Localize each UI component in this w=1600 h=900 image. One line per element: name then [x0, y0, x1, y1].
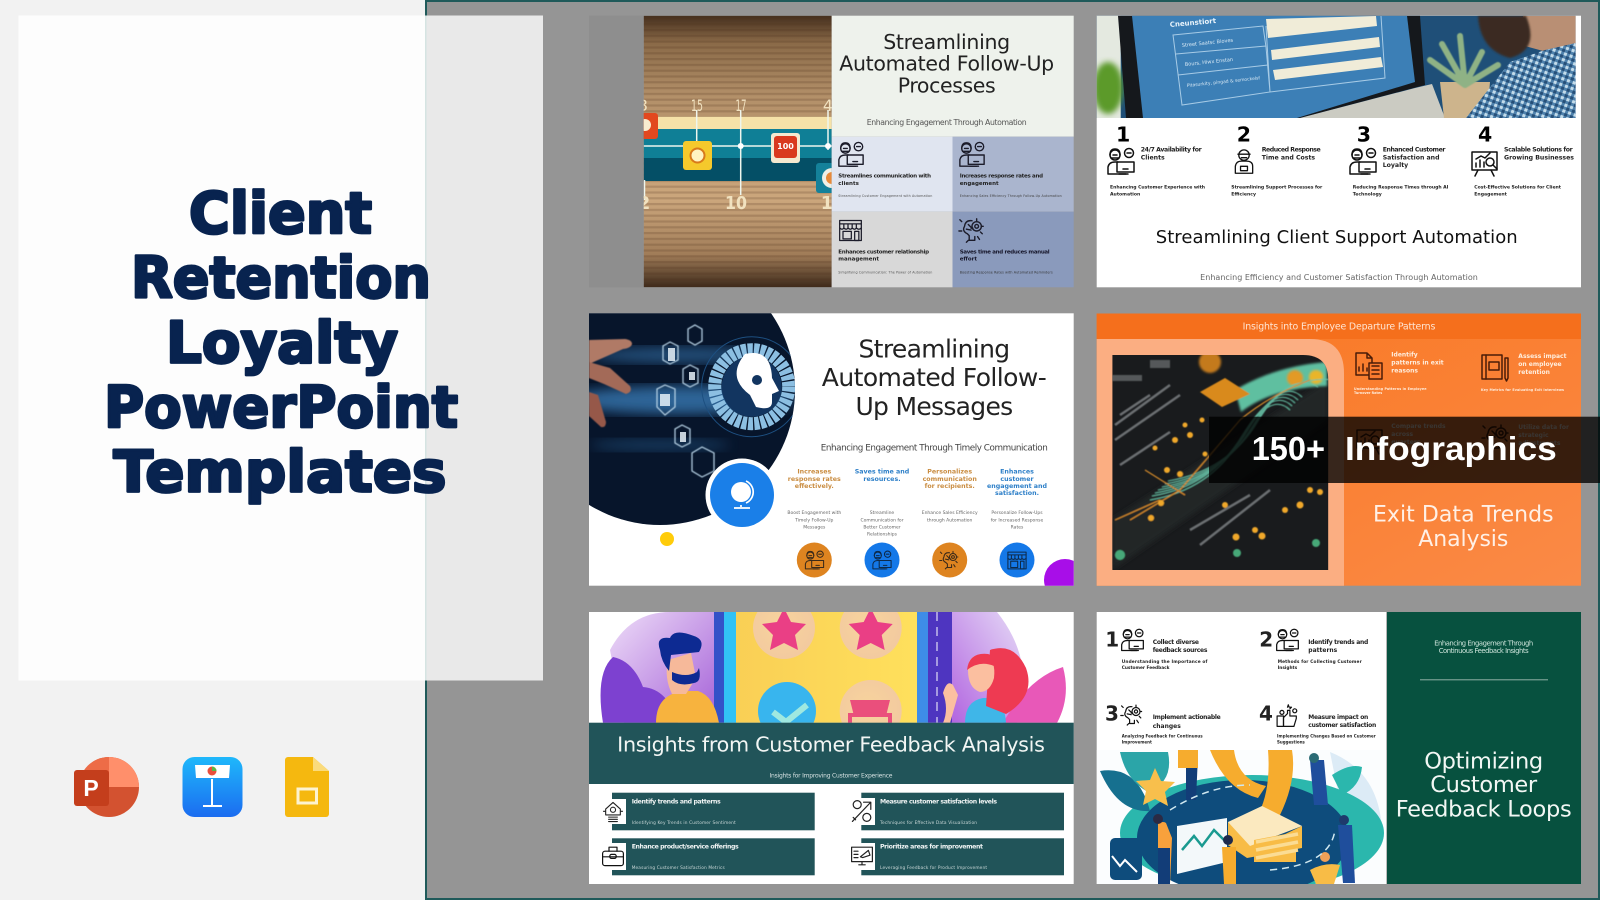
step 2: [1231, 123, 1323, 197]
step 2: Reduced Response: [1262, 146, 1321, 153]
item: utilize data: Utilize data for: [1518, 424, 1569, 431]
image: feedback illustration: [600, 612, 1066, 723]
column 1: effectively.: [795, 483, 834, 490]
card: saves time: [952, 212, 1074, 287]
card: enhances customer relationship: Simplifying Communication: The Power of Automation: [838, 270, 932, 274]
step 4: Scalable Solutions for: [1504, 146, 1574, 153]
step 2: Efficiency: [1231, 191, 1256, 197]
heading: slide 3 title: Automated Follow-: [822, 363, 1047, 392]
block: green title panel: Optimizing: [1424, 748, 1543, 774]
image: timeline on wood: 17: [736, 96, 746, 115]
icon: globe badge: [706, 458, 778, 532]
icon: PowerPoint: P: [83, 775, 99, 801]
step 1: Clients: [1141, 154, 1165, 161]
step 2: Insights: [1278, 665, 1298, 671]
column 4: Enhances: [1000, 469, 1034, 476]
icon: PowerPoint: [74, 757, 139, 817]
card: saves time: Saves time and reduces manual: [960, 249, 1050, 255]
step 2: [1259, 628, 1368, 671]
card: increases response rates: [952, 137, 1074, 212]
block: title area: Streamlining: [883, 30, 1010, 54]
step 3: [1350, 123, 1449, 197]
image: monitor and plant photo: Pitasurkity, pingad & semockelsf: [1187, 75, 1261, 89]
column 2: Saves time and: [855, 469, 909, 476]
column 2: [855, 469, 909, 578]
image: monitor and plant photo: Bours, Hiwx Enstan: [1185, 57, 1233, 68]
item: identify patterns: Turnover Rates: [1354, 391, 1382, 395]
item: assess impact: Assess impact: [1518, 353, 1567, 360]
card: enhance offerings: Enhance product/service offerings: [632, 844, 739, 851]
step 3: Analyzing Feedback for Continuous: [1122, 734, 1203, 739]
step 2: patterns: [1308, 647, 1338, 654]
step 4: Measure impact on: [1308, 714, 1368, 721]
card: measure satisfaction: Techniques for Effective Data Visualization: [879, 820, 977, 826]
column 3: communication: [923, 476, 977, 483]
image: data dashboard: [1112, 351, 1335, 570]
card: saves time: effort: [960, 257, 977, 263]
step 2: Methods for Collecting Customer: [1278, 659, 1363, 665]
block: title area: [832, 16, 1074, 137]
step 4: Suggestions: [1277, 740, 1305, 744]
step 3: 3: [1105, 702, 1119, 726]
step 1: Enhancing Customer Experience with: [1110, 185, 1205, 191]
panel: slide 5 customer feedback analysis: [589, 597, 1074, 884]
panel: title card: [18, 16, 543, 680]
image: monitor and plant photo: Cneunstiort: [1169, 17, 1217, 29]
item: identify patterns: [1354, 352, 1444, 395]
step 4: customer satisfaction: [1308, 722, 1376, 729]
item: identify patterns: patterns in exit: [1391, 360, 1444, 367]
step 4: [1259, 702, 1376, 744]
block: green title panel: Customer: [1430, 772, 1538, 798]
callout: 150+ Infographics band: Infographics: [1345, 430, 1557, 467]
block: title area: Automated Follow-Up: [839, 52, 1054, 76]
block: title area: Processes: [898, 74, 996, 98]
item: compare trends: quarters: [1391, 439, 1421, 446]
card: measure satisfaction: Measure customer satisfaction levels: [880, 798, 997, 805]
card: prioritize areas: Prioritize areas for improvement: [880, 844, 983, 851]
image: team feedback illustration: [1097, 750, 1386, 896]
callout: 150+ Infographics band: [1209, 417, 1600, 483]
heading: main title: Client: [189, 181, 372, 247]
heading: main title: Retention: [131, 246, 431, 312]
image: monitor and plant photo: Street Saatsc Bioves: [1182, 38, 1234, 49]
step 1: 1: [1105, 628, 1119, 652]
column 1: Boost Engagement with: [787, 510, 841, 516]
column 4: Rates: [1011, 524, 1024, 530]
heading: slide 2 title: Streamlining Client Support Automation: [1156, 227, 1518, 248]
step 1: Customer Feedback: [1122, 665, 1170, 671]
card: prioritize areas: Leveraging Feedback for Product Improvement: [880, 865, 987, 871]
image: timeline on wood: 1: [821, 193, 833, 214]
column 3: Enhance Sales Efficiency: [922, 510, 978, 516]
block: green title panel: [1387, 612, 1581, 884]
item: compare trends: [1357, 423, 1446, 454]
block: green title panel: Continuous Feedback Insights: [1439, 647, 1529, 655]
step 2: Identify trends and: [1308, 639, 1368, 646]
heading: slide 3 title: Streamlining: [858, 334, 1010, 363]
step 4: Implementing Changes Based on Customer: [1277, 734, 1376, 739]
step 3: 3: [1357, 123, 1371, 147]
step 1: Automation: [1110, 191, 1140, 197]
step 4: [1472, 123, 1574, 197]
column 3: for recipients.: [925, 483, 975, 490]
item: assess impact: [1481, 353, 1567, 392]
block: green title panel: Enhancing Engagement Through: [1434, 640, 1533, 648]
item: identify patterns: reasons: [1391, 368, 1418, 375]
yellow dot: [660, 532, 674, 546]
step 1: 24/7 Availability for: [1141, 146, 1203, 153]
subtitle: Enhancing Efficiency and Customer Satisfaction Through Automation: [1200, 273, 1478, 282]
step 3: Loyalty: [1383, 162, 1408, 169]
step 1: Understanding the Importance of: [1122, 659, 1208, 665]
step 3: Technology: [1353, 191, 1382, 197]
column 1: [787, 469, 841, 578]
column 1: Messages: [803, 524, 826, 530]
item: identify patterns: Understanding Patterns in Employee: [1354, 387, 1427, 391]
block: green title panel: Feedback Loops: [1396, 797, 1572, 823]
step 1: [1105, 628, 1208, 671]
column 3: [922, 469, 978, 578]
card: measure satisfaction: [850, 793, 1064, 830]
heading: main title: Loyalty: [166, 310, 398, 376]
panel: slide 4 exit data trends: [1097, 314, 1581, 586]
step 2: 2: [1259, 628, 1273, 652]
item: utilize data: [1482, 424, 1569, 450]
card: saves time: Boosting Response Rates with Automated Reminders: [960, 270, 1053, 274]
heading: slide 3 title: [822, 334, 1047, 421]
image: timeline on wood: 4: [823, 96, 833, 115]
column 4: for Increased Response: [991, 517, 1044, 523]
step 2: 2: [1237, 123, 1251, 147]
item: assess impact: Key Metrics for Evaluating Exit Interviews: [1481, 388, 1564, 392]
block: title area: Enhancing Engagement Through Automation: [867, 118, 1027, 127]
panel: slide 1 automated follow-up processes: [644, 16, 1074, 288]
card: prioritize areas: [850, 838, 1064, 875]
image: timeline on wood: 15: [691, 96, 703, 115]
callout: 150+ Infographics band: 150+: [1252, 430, 1325, 467]
step 3: Improvement: [1122, 740, 1152, 744]
card: streamlines communication: [832, 137, 952, 212]
item: identify patterns: Identify: [1391, 352, 1418, 359]
panel: slide gallery backdrop: [426, 1, 1599, 899]
icon: Google Slides: [285, 757, 329, 817]
image: timeline on wood: 3: [638, 96, 648, 115]
item: compare trends: Compare trends: [1391, 423, 1446, 430]
column 2: Streamline: [870, 510, 894, 516]
column 2: Relationships: [867, 532, 898, 538]
card: streamlines communication: Streamlining Customer Engagement with Automation: [838, 194, 932, 198]
step 4: 4: [1478, 123, 1492, 147]
column 3: Personalizes: [927, 469, 972, 476]
card: increases response rates: Increases response rates and: [960, 174, 1043, 180]
panel: slide 3 follow-up messages: [589, 313, 1074, 586]
card: streamlines communication: Streamlines communication with: [838, 174, 931, 180]
step 3: Implement actionable: [1153, 714, 1221, 721]
step 3: Satisfaction and: [1383, 154, 1440, 161]
column 2: resources.: [863, 476, 901, 483]
heading: slide 4 title: [1373, 503, 1554, 552]
heading: main title: [104, 181, 458, 506]
column 3: through Automation: [927, 517, 973, 523]
subtitle: Enhancing Engagement Through Timely Communication: [821, 443, 1048, 453]
card: enhances customer relationship: management: [838, 257, 879, 263]
step 4: Engagement: [1474, 191, 1508, 197]
column 4: [987, 469, 1047, 578]
step 4: Cost-Effective Solutions for Client: [1474, 185, 1562, 191]
column 2: Communication for: [860, 517, 904, 523]
column 4: customer: [1000, 476, 1035, 483]
image: support agent hologram: [500, 240, 1086, 601]
column 2: Better Customer: [863, 524, 901, 530]
step 2: Time and Costs: [1262, 154, 1315, 161]
item: utilize data: strategic: [1518, 432, 1549, 439]
item: assess impact: retention: [1518, 369, 1550, 376]
subtitle: Insights into Employee Departure Patterns: [1243, 321, 1435, 332]
image: timeline on wood: 100: [777, 142, 794, 151]
banner: title: [589, 723, 1074, 784]
step 1: [1108, 123, 1205, 197]
heading: slide 4 title: Analysis: [1418, 527, 1508, 552]
banner: title: Insights for Improving Customer Experience: [770, 772, 893, 779]
card: streamlines communication: clients: [838, 181, 860, 187]
item: assess impact: on employee: [1518, 361, 1562, 368]
card: enhances customer relationship: Enhances customer relationship: [838, 249, 929, 255]
item: utilize data: adjustments: [1518, 440, 1561, 447]
panel: slide 2 client support automation: [1093, 16, 1581, 287]
step 3: [1105, 702, 1221, 744]
banner: title: Insights from Customer Feedback Analysis: [617, 733, 1045, 757]
card: increases response rates: engagement: [960, 181, 999, 187]
step 3: changes: [1153, 723, 1181, 730]
icon: Keynote: [182, 757, 242, 817]
image: monitor and plant photo: [1093, 16, 1576, 118]
card: increases response rates: Enhancing Sales Efficiency Through Follow-Up Automation: [960, 194, 1062, 198]
heading: slide 3 title: Up Messages: [855, 392, 1013, 421]
step 1: 1: [1116, 123, 1130, 147]
column 1: Increases: [797, 469, 832, 476]
item: compare trends: across: [1391, 431, 1414, 438]
column 4: satisfaction.: [995, 490, 1039, 497]
card: identify trends: Identifying Key Trends in Customer Sentiment: [632, 820, 736, 826]
step 4: Growing Businesses: [1504, 154, 1574, 161]
column 4: Personalize Follow-Ups: [991, 510, 1043, 516]
image: timeline on wood: 10: [725, 193, 747, 214]
step 1: feedback sources: [1153, 647, 1208, 654]
heading: main title: Templates: [114, 440, 446, 506]
step 1: Collect diverse: [1153, 639, 1199, 646]
card: enhances customer relationship: [832, 212, 952, 287]
card: identify trends: [602, 793, 815, 830]
step 3: Reducing Response Times through AI: [1353, 185, 1449, 191]
card: enhance offerings: Measuring Customer Satisfaction Metrics: [632, 865, 725, 871]
step 2: Streamlining Support Processes for: [1231, 185, 1323, 191]
image: timeline on wood: [636, 16, 842, 287]
column 1: Timely Follow-Up: [794, 517, 834, 523]
heading: slide 4 title: Exit Data Trends: [1373, 503, 1554, 528]
card: enhance offerings: [602, 838, 815, 875]
card: identify trends: Identify trends and patterns: [632, 798, 721, 805]
column 4: engagement and: [987, 483, 1047, 490]
column 1: response rates: [788, 476, 841, 483]
step 3: Enhanced Customer: [1383, 146, 1446, 153]
image: timeline on wood: 2: [638, 193, 650, 214]
step 4: 4: [1259, 702, 1273, 726]
heading: main title: PowerPoint: [104, 375, 458, 441]
panel: slide 6 customer feedback loops: [1097, 612, 1581, 896]
